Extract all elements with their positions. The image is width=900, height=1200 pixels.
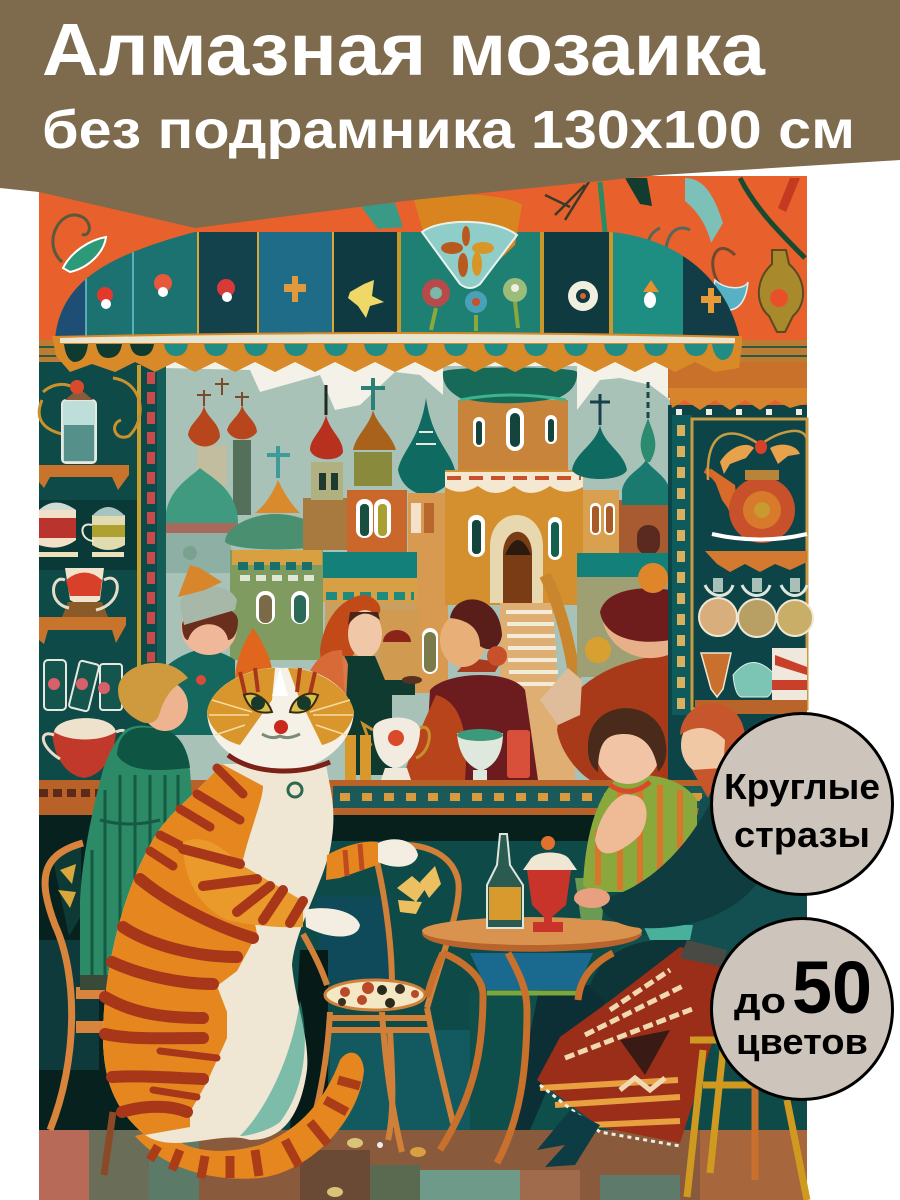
cat tail xyxy=(135,1053,364,1179)
teapot xyxy=(705,431,807,543)
badge: round rhinestones: Круглые xyxy=(724,766,880,807)
skirt xyxy=(537,947,720,1146)
central tower xyxy=(443,368,583,780)
floor xyxy=(39,1130,807,1200)
cups and glass xyxy=(701,648,807,700)
green glass in hand xyxy=(575,878,606,920)
boy in green coat xyxy=(168,546,238,735)
lower wall xyxy=(39,815,807,1135)
awning xyxy=(39,195,807,372)
floor crumbs xyxy=(327,1138,426,1197)
wall ornaments xyxy=(53,178,805,332)
front paw xyxy=(183,839,418,937)
awning emblem xyxy=(414,195,522,288)
teapot and cups on counter xyxy=(345,718,530,780)
window scene: city xyxy=(165,360,670,790)
seat dots xyxy=(338,982,419,1008)
cat right chair xyxy=(303,845,459,1152)
red cup xyxy=(43,718,126,778)
red and brown domes xyxy=(303,378,455,693)
cups xyxy=(39,502,125,557)
woman in brown xyxy=(403,599,538,780)
seated girl xyxy=(573,708,697,905)
woman's head and sleeve xyxy=(574,703,762,928)
green dome building xyxy=(225,446,325,660)
title: Алмазная мозаика xyxy=(42,8,766,91)
jar xyxy=(39,378,140,463)
chair back ornament xyxy=(397,866,441,914)
right towers xyxy=(572,378,670,677)
counter xyxy=(39,780,807,816)
left onion domes xyxy=(165,378,257,573)
tea table xyxy=(422,834,642,1163)
stripes xyxy=(105,768,253,1112)
right shelves xyxy=(668,345,813,785)
woman in patterned dress xyxy=(537,792,807,1200)
urn xyxy=(54,568,117,622)
man with red hat xyxy=(540,563,670,780)
badge: up to 50 colours: до xyxy=(734,980,786,1021)
left chair xyxy=(45,843,105,1130)
valance xyxy=(52,332,742,372)
bottle xyxy=(487,834,523,928)
cat head xyxy=(207,628,354,770)
glass domes xyxy=(44,660,122,712)
cat xyxy=(103,628,459,1179)
left shelves xyxy=(39,345,166,783)
awning flowers xyxy=(97,274,721,331)
badge: round rhinestones xyxy=(712,714,892,894)
badge: round rhinestones: стразы xyxy=(734,814,870,855)
cat body xyxy=(103,628,418,1143)
badge: up to 50 colours: 50 xyxy=(792,946,872,1029)
dessert glass xyxy=(523,836,577,932)
jars xyxy=(699,578,813,637)
collar xyxy=(228,755,330,797)
header banner xyxy=(0,0,900,228)
panel: painting xyxy=(39,176,813,1200)
subtitle: без подрамника 130х100 см xyxy=(42,100,855,160)
woman in red headscarf xyxy=(320,595,422,775)
rear chair leg xyxy=(104,1112,113,1175)
stool xyxy=(687,1040,807,1200)
badge: up to 50 colours xyxy=(712,918,892,1100)
person in striped green coat xyxy=(80,663,193,990)
badge: up to 50 colours: цветов xyxy=(736,1021,868,1062)
